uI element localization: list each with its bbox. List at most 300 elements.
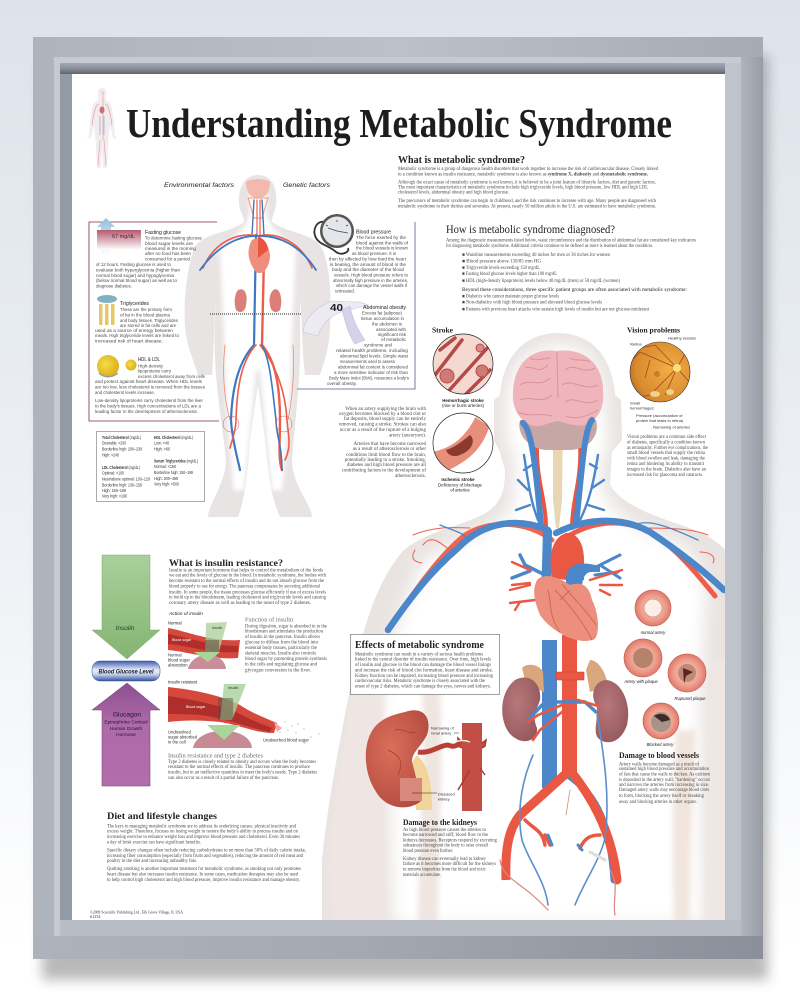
stroke text: oxygen becomes blocked by a blood clot or: [339, 412, 426, 417]
illustration: insulin resistant: Insulin: [228, 686, 238, 690]
ruptured plaque: [668, 654, 706, 701]
abdominal obesity text: abnormal lipid levels. Simple waist: [340, 354, 409, 358]
fasting glucose text: measured in the morning: [145, 246, 196, 251]
vision text: with blood swollen and leak, damaging the: [627, 456, 706, 462]
cholesterol values table: Optimal: <100: [102, 470, 124, 476]
small body kidneys: [235, 289, 247, 312]
hemorrhagic caption: Hemorrhagic stroke: [442, 398, 484, 403]
panel: what is insulin resistance: Insulin is an important hormone that helps to control the metabolism of the foods: [169, 568, 323, 574]
HDL LDL text: High-density: [138, 364, 164, 368]
vena cava and aorta: [542, 640, 557, 788]
abdominal obesity text: a more sensitive indicator of risk than: [334, 370, 408, 375]
cholesterol values table: Borderline high: 200–239: [102, 446, 142, 452]
arrow: glucagon: Glucagon: [113, 712, 141, 718]
blood pressure text: vessels. High blood pressure refers to: [334, 272, 408, 278]
shoulder arteries: [408, 522, 718, 598]
function of insulin text: glucose to diffuse from the blood into: [245, 640, 318, 646]
panel: vision problems: [627, 326, 709, 478]
stroke text: conditions limit blood flow to the brain,: [346, 453, 426, 458]
title: Understanding Metabolic Syndrome: [126, 100, 672, 146]
triglycerides text: and body tissues. Triglycerides: [120, 318, 179, 323]
triglycerides text: meals. High triglyceride levels are linked to: [95, 333, 179, 338]
neck veins: [516, 420, 604, 525]
stroke text: as a result of atherosclerosis or other: [353, 447, 426, 452]
kidney labels: [412, 726, 459, 802]
blood pressure text: then by affected by how hard the heart: [329, 256, 407, 262]
vision text: small blood vessels that supply the retina: [627, 451, 706, 456]
triglycerides text: These are the primary form: [120, 307, 172, 312]
fasting glucose text: consumed for a period: [145, 256, 190, 262]
normal artery: [635, 590, 671, 635]
panel: how is metabolic syndrome diagnosed: ■ Non-diabetics with high blood pressure and elevated blood glucose levels: [462, 300, 602, 306]
icon: blood pressure gauge: [314, 214, 354, 254]
panel: right side factors box: [297, 214, 415, 389]
cholesterol values table: Very high: >500: [154, 482, 179, 486]
vision text: retina and hindering its ability to transmit: [627, 462, 705, 467]
cholesterol values table: Serum Triglycerides (mg/dL): [154, 458, 198, 464]
blood pressure text: the blood vessels is known: [356, 246, 408, 250]
panel: what is insulin resistance: Action of insulin: [168, 611, 203, 616]
cholesterol values table: Total Cholesterol (mg/dL): [102, 435, 141, 440]
abdominal obesity text: syndrome and: [364, 342, 392, 348]
cerebrum: [513, 350, 603, 426]
abdominal obesity text: associated with: [376, 327, 406, 332]
panel: diet and lifestyle changes: Specific dietary changes often include reducing carbohydrates to no more than 50% of daily calorie intake,: [107, 848, 306, 854]
triglycerides text: Triglycerides: [120, 301, 149, 307]
icon: glucose arrow: 67 mg/dL: [112, 234, 135, 240]
illustration: insulin resistant: Blood sugar: [186, 705, 206, 709]
retina labels: Small: [630, 400, 640, 406]
panel: how is metabolic syndrome diagnosed: for diagnosing metabolic syndrome. Additional criteria continue to be defined as more is learned about the condition.: [446, 244, 653, 249]
ischemic caption: Ischemic stroke: [441, 477, 475, 482]
panel: how is metabolic syndrome diagnosed: How is metabolic syndrome diagnosed?: [446, 222, 615, 236]
vision text: Vision problems are a common side effect: [627, 435, 707, 440]
icon: HDL and LDL particles: [97, 355, 136, 377]
panel: what is insulin resistance: insulin. In some people, the tissue processes glucose efficiently if use of excess levels: [169, 590, 326, 596]
panel: damage to the kidneys: become narrowed and stiff, blood flow to the: [403, 833, 489, 838]
icon: glucose arrow: [97, 218, 141, 255]
copyright: [90, 910, 183, 919]
panel: stroke: Stroke: [432, 326, 454, 334]
illustration: normal insulin action: Blood sugar: [172, 638, 192, 642]
stroke text: diabetes and high blood pressure are all: [347, 463, 427, 468]
fasting glucose text: Fasting glucose: [145, 230, 181, 236]
function of insulin text: Function of insulin: [245, 616, 293, 624]
blood pressure text: The force exerted by the: [356, 235, 406, 240]
blood pressure text: which can damage the vessel walls if: [336, 283, 408, 288]
panel: diet and lifestyle changes: excess weight. Therefore, focuses on losing weight to restore the body's ability to process insulin and on: [107, 830, 298, 834]
panel: damage to blood vessels: sustained high blood pressure and accumulation: [619, 767, 709, 772]
waist line: [210, 314, 301, 315]
retina labels: [630, 336, 696, 430]
panel: what is metabolic syndrome: The precursors of metabolic syndrome can begin in childhood, and the risk continues to increase with age. Many people are diagnosed with: [398, 199, 656, 204]
retina labels: protein that leaks in retina): [636, 418, 684, 423]
ruptured plaque: Ruptured plaque: [675, 696, 706, 701]
panel: what is metabolic syndrome: The most important characteristics of metabolic syndrome include high triglyceride levels, high blood pressure, low HDL and high LDL: [398, 186, 648, 190]
body interior highlight: [378, 345, 705, 925]
panel: how is metabolic syndrome diagnosed: Among the diagnostic measurements listed below, waist circumference and the distribution of abdominal fat are considered key indicators: [446, 238, 696, 244]
blood glucose level pill: Blood Glucose Level: [98, 668, 154, 676]
kidney labels: kidney: [438, 796, 450, 802]
aortic bifurcation: [500, 715, 617, 915]
abdominal obesity text: related health problems, including: [336, 348, 408, 353]
panel: damage to the kidneys: to remove impurities from the blood and toxic: [403, 868, 487, 872]
panel: damage to blood vessels: Artery walls become damaged as a result of: [619, 762, 699, 768]
blood pressure text: abnormally high pressure in the arteries,: [333, 278, 408, 283]
diseased patch: [400, 778, 422, 801]
panel: what is metabolic syndrome: [398, 154, 658, 210]
panel: damage to blood vessels: and narrows the arteries from increasing in size.: [619, 783, 709, 788]
brain: [513, 350, 603, 450]
HDL LDL text: and protect against heart disease. When HDL levels: [95, 379, 203, 384]
panel: what is insulin resistance: What is insulin resistance?: [169, 558, 283, 569]
hemorrhagic caption: (rise or burst arteries): [442, 403, 485, 408]
cholesterol values table: Normal: <150: [154, 464, 176, 469]
cholesterol values table: Borderline high: 150–199: [154, 470, 193, 475]
panel: damage to the kidneys: materials accumulate.: [403, 873, 441, 878]
function of insulin text: bloodstream and stimulates the production: [245, 630, 323, 634]
panel: what is metabolic syndrome: metabolic syndrome in their thirties and seventies. At present, nearly 50 million adults in the U.S. are estimated to have metabolic syndrome.: [398, 204, 656, 210]
blood pressure text: body and the diameter of the blood: [332, 267, 404, 272]
arrow: insulin: [92, 555, 160, 659]
panel: what is insulin resistance: resistant to the normal effects of insulin. The pancreas continues to produce: [168, 765, 311, 770]
cholesterol values table: High: 160–189: [102, 488, 126, 493]
stroke text: [339, 407, 427, 479]
ischemic caption: of arteries: [450, 488, 471, 492]
cholesterol values table: Very high: >190: [102, 494, 127, 498]
blood glucose level pill: [92, 661, 160, 681]
shoulder veins: [388, 521, 724, 630]
stroke text: Arteries that have become narrowed: [354, 442, 426, 447]
small body face: [246, 179, 270, 198]
abdominal obesity text: Abdominal obesity: [363, 305, 406, 311]
panel: diet and lifestyle changes: increasing exercise to enhance weight loss and improve blood pressure and cholesterol. Even 30 minutes: [107, 835, 300, 840]
panel: effects of metabolic syndrome: linked to the central disorder of insulin resistance. Over time, high levels: [355, 658, 491, 662]
panel: damage to the kidneys: Damage to the kidneys: [403, 818, 477, 827]
panel: diet and lifestyle changes: Quitting smoking is another important treatment for metabolic syndrome, as smoking not only promotes: [107, 867, 301, 872]
panel: what is insulin resistance: Type 2 diabetes is closely related to obesity and occurs when the body becomes: [168, 760, 316, 765]
blood pressure text: is beating, the amount of blood in the: [330, 262, 406, 267]
blood pressure text: untreated.: [335, 288, 355, 294]
vision text: [627, 435, 709, 478]
panel: stroke: [339, 326, 493, 492]
HDL LDL text: leading factor in the development of atherosclerosis.: [95, 409, 198, 414]
left arm shading: [376, 695, 384, 726]
blood pressure text: Blood pressure: [356, 230, 391, 236]
panel: effects of metabolic syndrome: Kidney function can be impaired, increasing blood pressure and increasing: [355, 674, 493, 679]
abdominal obesity text: significant risk: [378, 332, 407, 337]
factor labels: Genetic factors: [283, 182, 331, 189]
kidney labels: Narrowing of: [431, 726, 455, 730]
arrow: glucagon: Epinephrine Cortisol: [104, 720, 148, 726]
vision text: images to the brain. Diabetics also have an: [627, 468, 706, 472]
fasting glucose text: To determine fasting glucose: [145, 236, 202, 240]
factor labels: [164, 182, 330, 187]
retina circle: [630, 342, 692, 402]
triglycerides text: of fat in the blood plasma: [120, 312, 170, 318]
neck arteries: [535, 447, 582, 530]
stroke text: When an artery supplying the brain with: [345, 407, 426, 412]
fasting glucose text: evaluate both hyperglycemia (higher than: [96, 268, 180, 272]
panel: effects of metabolic syndrome: of insulin and glucose in the blood can damage the blood vessel linings: [355, 663, 491, 668]
vision text: increased risk for glaucoma and cataracts.: [627, 473, 703, 478]
panel: diet and lifestyle changes: poultry in the diet and increasing unhealthy fats.: [107, 859, 197, 864]
panel: what is metabolic syndrome: Although the exact cause of metabolic syndrome is not known, it is believed to be a joint feature of lifestyle factors, diet and genetic factors.: [398, 180, 656, 186]
panel: what is insulin resistance: Insulin resistance and type 2 diabetes: [168, 754, 264, 760]
cholesterol values table: High: 200–499: [154, 476, 178, 481]
blocked artery: Blocked artery: [647, 742, 674, 747]
poster sheet: [72, 74, 725, 920]
HDL LDL text: HDL & LDL: [138, 357, 160, 363]
cholesterol values table: Desirable: <200: [102, 440, 126, 446]
panel: what is insulin resistance: blood properly to use for energy. The pancreas compensates by secreting additional: [169, 584, 321, 590]
ischemic caption: Deficiency of blockage: [438, 482, 483, 488]
abdominal obesity text: abdominal fat content is considered: [338, 364, 408, 370]
factor labels: Environmental factors: [164, 182, 235, 189]
panel: what is metabolic syndrome: What is metabolic syndrome?: [398, 154, 525, 166]
stroke text: atherosclerosis.: [395, 474, 426, 479]
panel: diet and lifestyle changes: a day of brisk exercise can have significant benefits.: [107, 840, 201, 846]
ischemic stroke circle: [432, 413, 493, 474]
panel: diet and lifestyle changes: Diet and lifestyle changes: [107, 811, 217, 822]
function of insulin text: of insulin in the pancreas. Insulin allows: [245, 635, 320, 640]
icon: tape measure: 40: [330, 303, 344, 314]
abdominal obesity text: the abdomen is: [372, 322, 403, 326]
hemorrhagic caption: [442, 398, 485, 408]
stroke text: artery (aneurysm).: [389, 434, 426, 438]
spinal cord: [553, 450, 563, 528]
panel: how is metabolic syndrome diagnosed: Beyond these considerations, three specific patient groups are often associated with metabolic syndrome:: [462, 288, 687, 293]
kidney labels: Diseased: [438, 792, 455, 796]
function of insulin text: in the cells and regulating glucose and: [245, 662, 317, 668]
fasting glucose text: diagnose diabetes.: [96, 284, 132, 288]
panel: diet and lifestyle changes: The keys to managing metabolic syndrome are to address its underlying causes: physical inactivity and: [107, 824, 296, 830]
abdominal obesity text: Body Mass Index (BMI), measures a body's: [329, 376, 410, 380]
blood pressure text: [329, 230, 409, 294]
fasting glucose text: normal blood sugar) and hypoglycemia: [96, 273, 174, 278]
panel: what is insulin resistance: insulin, but in an ineffective quantities to meet the body's needs. Type 2 diabetes: [168, 770, 317, 776]
vision text: as retinopathy. Further eye complications, the: [627, 446, 709, 451]
vision text: of diabetes, specifically a condition known: [627, 440, 705, 446]
function of insulin text: skeletal muscles. Insulin also controls: [245, 652, 316, 656]
panel: damage to the kidneys: Kidney disease can eventually lead to kidney: [403, 857, 486, 862]
panel: what is metabolic syndrome: to a condition known as insulin resistance, metabolic syndrome is also known as syndrome X, diabesity and dysmetabolic syndrome.: [398, 172, 649, 178]
stroke text: removed, causing a stroke. Strokes can also: [339, 422, 426, 428]
function of insulin text: [245, 616, 328, 674]
torso left edge shading: [418, 690, 441, 925]
triglycerides text: used as a source of energy between: [95, 328, 173, 333]
panel: effects of metabolic syndrome: onset of type 2 diabetes, which can damage the eyes, nerves and kidneys.: [355, 684, 491, 690]
abdominal obesity text: tissue accumulation in: [361, 316, 404, 321]
panel: what is insulin resistance: can also occur as a result of a partial failure of the pancreas.: [168, 776, 279, 781]
cholesterol values table: Borderline high: 130–159: [102, 482, 142, 488]
panel: diet and lifestyle changes: heart disease but also increases insulin resistance. In some cases, medication therapies may also be used: [107, 872, 298, 878]
panel: damage to blood vessels: away and blocking arteries in other organs.: [619, 800, 697, 805]
retina labels: Pressure (accumulation of: [636, 413, 683, 418]
panel: what is insulin resistance: coronary artery disease as well as leading to the onset of type 2 diabetes.: [169, 601, 311, 606]
adrenal glands: [522, 660, 608, 692]
HDL LDL text: [95, 357, 206, 414]
cholesterol values table: Low: <40: [154, 440, 169, 446]
panel: effects of metabolic syndrome: Metabolic syndrome can result in a variety of serious health problems: [355, 652, 483, 658]
icon: tape measure: [303, 301, 368, 344]
kidney labels: renal artery: [431, 730, 451, 736]
copyright: ©2009 Scientific Publishing Ltd., Elk Grove Village, IL USA: [90, 910, 183, 916]
small body heart: [249, 239, 270, 273]
blocked artery: [643, 703, 679, 747]
panel: how is metabolic syndrome diagnosed: ■ Waistline measurements exceeding 40 inches for men or 36 inches for women: [462, 253, 610, 258]
fasting glucose text: [96, 230, 202, 288]
abdominal obesity text: Excess fat (adipose): [362, 310, 402, 316]
panel: how is metabolic syndrome diagnosed: [446, 222, 696, 312]
body kidneys: [502, 677, 628, 742]
cholesterol values table: High: >240: [102, 452, 119, 458]
panel: diet and lifestyle changes: to help control high cholesterol and high blood pressure, improve insulin resistance and manage obesity.: [107, 878, 300, 883]
knee circles: [223, 416, 239, 432]
pulmonary artery: [566, 564, 600, 585]
HDL LDL text: to the body's tissues. High concentrations of LDL are a: [95, 404, 201, 408]
panel: effects of metabolic syndrome: Effects of metabolic syndrome: [355, 640, 485, 651]
pulmonary vessels: [510, 555, 622, 610]
HDL LDL text: and cholesterol levels increase.: [95, 390, 155, 395]
illustration: insulin resistant: Unabsorbed blood sugar: [263, 738, 309, 742]
panel: what is insulin resistance: we eat and the levels of glucose in the blood. In metabolic syndrome, the bodies with: [169, 574, 326, 578]
illustration: insulin resistant: Undissolved: [168, 730, 191, 734]
large anatomical figure: [322, 333, 760, 925]
arrow: glucagon: Human Growth: [110, 726, 142, 732]
retina labels: Healthy vessels: [668, 336, 696, 340]
function of insulin text: blood sugar by promoting protein synthesis: [245, 657, 327, 662]
arrow: insulin: Insulin: [116, 625, 135, 632]
aortic arch: [551, 533, 584, 580]
blood pressure text: blood against the walls of: [356, 240, 409, 246]
function of insulin text: During digestion, sugar is absorbed in to the: [245, 624, 328, 630]
torso right edge shading: [673, 730, 696, 925]
retina labels: Retina: [630, 342, 642, 346]
panel: how is metabolic syndrome diagnosed: ■ Fasting blood glucose levels higher than 100 mg/dL: [462, 272, 557, 277]
illustration: large kidney: [366, 710, 429, 807]
ischemic caption: [438, 477, 483, 492]
abdominal obesity text: overall obesity.: [327, 381, 357, 386]
icon: triglycerides: [97, 295, 117, 325]
panel: effects of metabolic syndrome: cardiovascular risks. Metabolic syndrome is closely associated with the: [355, 679, 486, 684]
panel: what is metabolic syndrome: cholesterol levels, abdominal obesity and high blood glucose.: [398, 190, 509, 196]
panel: damage to blood vessels: Damage to blood vessels: [619, 751, 699, 760]
illustration: insulin resistant: [168, 684, 320, 748]
illustration: ureter and aorta: [410, 723, 486, 811]
panel: damage to blood vessels: Damaged artery walls may encourage blood clots: [619, 788, 709, 793]
panel: what is insulin resistance: to build up in the bloodstream, leading cholesterol and triglyceride levels and causing: [169, 596, 326, 600]
panel: what is metabolic syndrome: Metabolic syndrome is a group of dangerous health disorders that work together to increase the risk of cardiovascular disease. Closely linked: [398, 167, 658, 172]
panel: effects of metabolic syndrome: and increase the risk of blood clot formation, heart disease and stroke.: [355, 668, 493, 674]
panel: damage to the kidneys: kidneys decreases. Receptors respond by excreting: [403, 838, 497, 844]
illustration: insulin resistant: in the cell: [168, 740, 186, 744]
cholesterol values table: HDL Cholesterol (mg/dL): [154, 435, 193, 440]
triglycerides text: increased risk of heart disease.: [95, 338, 163, 344]
panel: damage to blood vessels: [619, 751, 710, 805]
fasting glucose text: after no food has been: [145, 251, 191, 256]
function of insulin text: glycogen conversion in the liver.: [245, 668, 311, 674]
abdominal obesity text: [327, 305, 410, 386]
panel: vision problems: Vision problems: [627, 326, 680, 334]
HDL LDL text: Low-density lipoproteins carry cholesterol from the liver: [95, 398, 203, 403]
stroke text: occur as a result of the rupture of a bulging: [340, 428, 426, 433]
HDL LDL text: lipoproteins carry: [138, 368, 172, 374]
illustration: normal insulin action: Insulin: [212, 626, 222, 630]
aorta renal collar: [556, 672, 584, 680]
fasting glucose text: of 12 hours. Fasting glucose is used to: [96, 262, 171, 267]
right arm shading: [706, 660, 730, 925]
panel: damage to the kidneys: substances throughout the body to raise overall: [403, 844, 489, 848]
illustration: normal insulin action: Normal: [168, 652, 182, 658]
triglycerides text: are stored in fat cells and are: [120, 323, 176, 328]
panel: damage to the kidneys: As high blood pressure causes the arteries to: [403, 828, 486, 833]
HDL LDL text: are too low, less cholesterol is removed from the tissues: [95, 384, 206, 390]
panel: damage to blood vessels: to form, blocking the artery itself or breaking: [619, 794, 704, 799]
blood pressure text: as blood pressure. It is: [352, 251, 397, 256]
illustration: normal insulin action: absorption: [168, 662, 188, 668]
arrow: glucagon: [92, 683, 160, 786]
illustration: normal insulin action: blood sugar: [168, 658, 190, 662]
panel: what is insulin resistance: become resistant to the normal effects of insulin and do not absorb glucose from the: [169, 579, 325, 584]
stroke text: contributing factors to the development of: [342, 468, 426, 474]
stroke text: potentially leading to a stroke. Smoking,: [345, 458, 426, 463]
abdominal obesity text: measurements used to assess: [340, 359, 396, 364]
cholesterol values table: [96, 432, 204, 502]
artery with plaque: [623, 639, 662, 684]
panel: damage to blood vessels: is deposited in the artery wall, "hardening" occurs: [619, 778, 710, 783]
illustration: normal insulin action: [168, 622, 240, 669]
cholesterol values table: High: >60: [154, 446, 170, 452]
panel: what is insulin resistance: [168, 558, 328, 781]
normal artery: normal artery: [641, 630, 666, 635]
panel: how is metabolic syndrome diagnosed: ■ HDL (high-density lipoprotein) levels below 40 mg/dL (men) or 50 mg/dL (women): [462, 279, 620, 284]
icon: small anatomy figure: [87, 88, 117, 168]
panel: damage to blood vessels: of fats that cause the walls to thicken. As calcium: [619, 772, 710, 778]
panel: how is metabolic syndrome diagnosed: ■ Diabetics who cannot maintain proper glucose levels: [462, 294, 559, 300]
retina labels: Narrowing of arteries: [653, 424, 690, 430]
panel: risk factors left box: [89, 218, 219, 421]
fasting glucose text: (below normal blood sugar) as well as to: [96, 278, 177, 283]
panel: damage to the kidneys: blood pressure even further.: [403, 849, 453, 854]
fasting glucose text: blood sugar levels are: [145, 241, 193, 246]
panel: how is metabolic syndrome diagnosed: ■ Patients with previous heart attacks who sustain high levels of insulin but are not glucose-intolerant: [462, 308, 650, 312]
heart: [534, 576, 598, 641]
stroke text: fat deposits, blood supply can be entirely: [344, 417, 426, 422]
panel: artery cross sections: [623, 590, 706, 747]
panel: diet and lifestyle changes: increasing fiber consumption (especially from fruits and vegetables), reducing the amount of red meat and: [107, 854, 303, 859]
artery with plaque: Artery with plaque: [623, 679, 658, 684]
arrow: glucagon: Hormone: [116, 732, 136, 738]
panel: diet and lifestyle changes: [107, 811, 306, 883]
panel: damage to the kidneys: failure as it becomes more difficult for the kidneys: [403, 862, 496, 867]
panel: what is insulin resistance: Insulin resistant: [168, 680, 198, 684]
panel: what is insulin resistance: Normal: [168, 620, 182, 626]
HDL LDL text: excess cholesterol away from cells: [138, 374, 206, 379]
abdominal obesity text: of metabolic: [381, 337, 407, 342]
panel: damage to the kidneys: [366, 710, 497, 878]
panel: how is metabolic syndrome diagnosed: ■ Blood pressure above 130/85 mm HG: [462, 260, 541, 264]
retina labels: hemorrhages: [630, 406, 654, 410]
cholesterol values table: Near/above optimal: 100–129: [102, 476, 150, 482]
renal vessels: [528, 700, 598, 740]
copyright: #1234: [90, 914, 101, 919]
small body figure: [185, 175, 331, 517]
cholesterol values table: LDL Cholesterol (mg/dL): [102, 465, 140, 470]
small body veins and arteries: [200, 200, 316, 470]
function of insulin text: essential body tissues, particularly the: [245, 646, 318, 651]
panel: how is metabolic syndrome diagnosed: ■ Triglyceride levels exceeding 150 mg/dL: [462, 266, 540, 271]
